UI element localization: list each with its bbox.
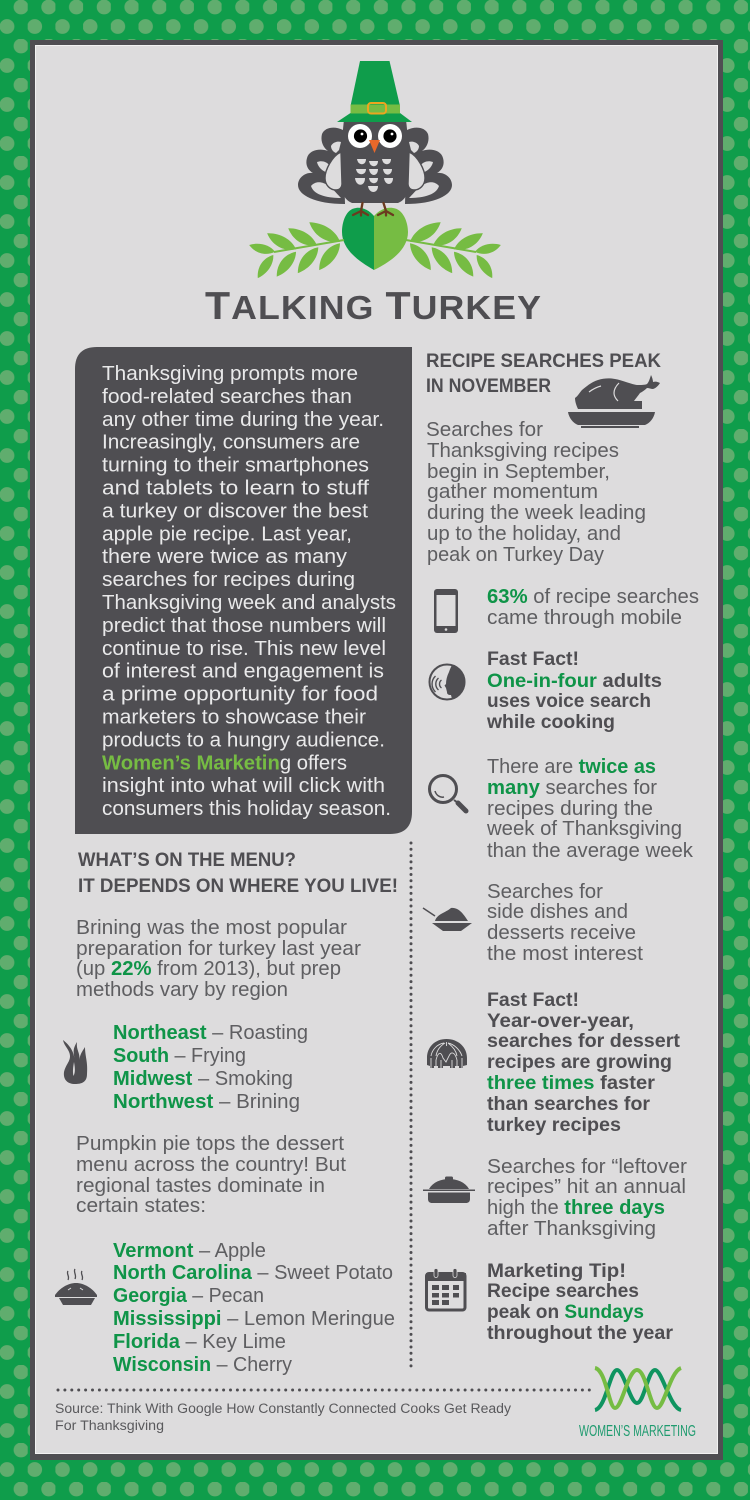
panel: intro text on dark box: predict that those numbers will (102, 614, 386, 637)
list: turkey prep by region: South – Frying (113, 1044, 246, 1067)
panel: intro text on dark box: apple pie recipe. Last year, (102, 522, 352, 545)
pilgrim hat (337, 61, 412, 122)
stat: twice as many: recipes during the (487, 797, 653, 820)
list: turkey prep by region (113, 1021, 308, 1113)
icon: flame (63, 1040, 87, 1084)
stat: 63 percent mobile: 63% of recipe searches (487, 585, 699, 608)
list: turkey prep by region: Northeast – Roasting (113, 1021, 308, 1044)
list: pies by state (113, 1239, 395, 1376)
stat: twice as many: than the average week (487, 839, 694, 862)
text: pumpkin pie paragraph: menu across the country! But (76, 1153, 346, 1176)
heading: recipe searches peak (426, 351, 661, 397)
panel: intro text on dark box: and tablets to learn to stuff (102, 476, 369, 500)
panel: intro text on dark box: a turkey or discover the best (102, 499, 368, 522)
icon: bundt cake (427, 1039, 467, 1068)
panel: intro text on dark box: Women’s Marketing offers (102, 751, 347, 774)
text: side dishes and desserts: side dishes and (487, 900, 628, 923)
text: searches for thanksgiving recipes: up to the holiday, and (427, 522, 621, 545)
icon: roast turkey on platter (568, 375, 660, 428)
text: leftover recipes: recipes” hit an annual (487, 1175, 686, 1198)
panel: intro text on dark box: turning to their smartphones (102, 454, 369, 477)
heading: recipe searches peak: RECIPE SEARCHES PEAK (426, 351, 661, 372)
panel: intro text on dark box: products to a hungry audience. (102, 728, 385, 751)
panel: intro text on dark box: consumers this holiday season. (102, 797, 391, 820)
list: pies by state: Mississippi – Lemon Meringue (113, 1307, 395, 1330)
icon: serving bowl (423, 908, 472, 931)
list: pies by state: Vermont – Apple (113, 1239, 266, 1262)
logo: women's marketing (579, 1368, 696, 1440)
text: brining paragraph: methods vary by region (76, 978, 288, 1001)
fast fact: voice search: Fast Fact! (487, 648, 579, 670)
text: brining paragraph: (up 22% from 2013), but prep (76, 957, 341, 980)
panel: intro text on dark box: food-related searches than (102, 385, 352, 408)
owl body (341, 120, 409, 203)
heading: recipe searches peak: IN NOVEMBER (426, 376, 551, 397)
text: leftover recipes: Searches for “leftover (487, 1155, 687, 1178)
fast fact: voice search (486, 648, 662, 733)
fast fact: dessert searches: searches for dessert (487, 1030, 681, 1052)
belly feathers (355, 159, 393, 192)
source note (55, 1401, 511, 1433)
source note: For Thanksgiving (55, 1418, 164, 1433)
text: brining paragraph (76, 916, 361, 1001)
text: side dishes and desserts: the most interest (487, 942, 643, 965)
stat: 63 percent mobile: came through mobile (487, 606, 682, 629)
list: turkey prep by region: Northwest – Brining (113, 1090, 300, 1113)
fast fact: dessert searches: Fast Fact! (487, 989, 579, 1011)
panel: intro text on dark box: searches for recipes during (102, 568, 355, 591)
tail feathers (298, 128, 452, 204)
panel: intro text on dark box: Thanksgiving prompts more (102, 362, 358, 385)
fast fact: voice search: One-in-four adults (487, 670, 662, 692)
text: searches for thanksgiving recipes: begin in September, (427, 460, 610, 483)
stat: 63 percent mobile (487, 585, 699, 629)
panel: intro text on dark box: any other time during the year. (102, 408, 384, 431)
marketing tip (487, 1260, 673, 1344)
title: TALKING TURKEY (205, 285, 542, 328)
text: searches for thanksgiving recipes: Thanksgiving recipes (427, 439, 619, 462)
text: searches for thanksgiving recipes: during the week leading (427, 501, 646, 524)
wings (325, 152, 425, 190)
illustration: pilgrim hat turkey on a heart with branches (248, 61, 502, 281)
panel: intro text on dark box: a prime opportunity for food (102, 683, 378, 706)
fast fact: voice search: while cooking (486, 711, 615, 733)
icon: calendar (426, 1268, 466, 1310)
fast fact: dessert searches: turkey recipes (487, 1114, 621, 1136)
feet (353, 203, 393, 216)
text: searches for thanksgiving recipes (426, 418, 646, 566)
text: side dishes and desserts (487, 880, 643, 965)
panel: intro text on dark box: Thanksgiving week and analysts (102, 591, 396, 614)
text: leftover recipes (487, 1155, 687, 1240)
icon: voice search (430, 664, 465, 700)
stat: twice as many: many searches for (487, 776, 657, 799)
text: pumpkin pie paragraph: certain states: (76, 1194, 206, 1217)
icon: magnifying glass (430, 776, 466, 811)
heading: what's on the menu (78, 850, 398, 897)
text: leftover recipes: high the three days (487, 1196, 665, 1219)
heading: what's on the menu: WHAT’S ON THE MENU? (78, 850, 296, 871)
list: pies by state: Wisconsin – Cherry (113, 1353, 293, 1376)
list: pies by state: North Carolina – Sweet Potato (113, 1261, 393, 1284)
text: searches for thanksgiving recipes: Searches for (426, 418, 543, 441)
fast fact: dessert searches: recipes are growing (487, 1051, 672, 1073)
text: leftover recipes: after Thanksgiving (487, 1217, 656, 1240)
text: side dishes and desserts: desserts receive (487, 921, 636, 944)
fast fact: voice search: uses voice search (487, 690, 651, 712)
text: searches for thanksgiving recipes: peak on Turkey Day (427, 543, 605, 566)
right branch (406, 218, 502, 281)
stat: twice as many: week of Thanksgiving (486, 817, 682, 840)
panel: intro text on dark box: continue to rise. This new level (102, 637, 386, 660)
fast fact: dessert searches: three times faster (487, 1072, 655, 1094)
left branch (248, 218, 344, 281)
heart (342, 208, 408, 270)
text: brining paragraph: preparation for turkey last year (76, 937, 361, 960)
list: turkey prep by region: Midwest – Smoking (113, 1067, 293, 1090)
icon: smartphone (434, 589, 458, 633)
icon: cooking pot (423, 1176, 475, 1203)
stat: twice as many (486, 755, 694, 862)
fast fact: dessert searches: Year-over-year, (487, 1010, 634, 1032)
marketing tip: Recipe searches (487, 1280, 639, 1302)
text: pumpkin pie paragraph: regional tastes dominate in (76, 1174, 325, 1197)
list: pies by state: Georgia – Pecan (113, 1284, 264, 1307)
text: pumpkin pie paragraph (76, 1132, 346, 1217)
marketing tip: throughout the year (487, 1322, 673, 1344)
text: pumpkin pie paragraph: Pumpkin pie tops the dessert (76, 1132, 344, 1155)
list: pies by state: Florida – Key Lime (113, 1330, 286, 1353)
marketing tip: peak on Sundays (487, 1301, 644, 1323)
panel: intro text on dark box: Increasingly, consumers are (102, 431, 360, 454)
panel: intro text on dark box: insight into what will click with (102, 774, 385, 797)
fast fact: dessert searches: than searches for (487, 1093, 650, 1115)
text: side dishes and desserts: Searches for (487, 880, 603, 903)
heading: what's on the menu: IT DEPENDS ON WHERE YOU LIVE! (78, 876, 398, 897)
fast fact: dessert searches (487, 989, 681, 1136)
panel: intro text on dark box: marketers to showcase their (102, 706, 366, 728)
panel: intro text on dark box: there were twice as many (102, 545, 348, 568)
eyes and beak (348, 124, 402, 153)
marketing tip: Marketing Tip! (487, 1260, 626, 1282)
source note: Source: Think With Google How Constantly Connected Cooks Get Ready (55, 1401, 511, 1416)
stat: twice as many: There are twice as (487, 755, 656, 778)
panel: intro text on dark box (75, 347, 412, 834)
text: brining paragraph: Brining was the most popular (76, 916, 347, 939)
text: searches for thanksgiving recipes: gather momentum (427, 480, 598, 503)
panel: intro text on dark box: of interest and engagement is (102, 660, 384, 683)
icon: steaming pie (55, 1269, 97, 1305)
